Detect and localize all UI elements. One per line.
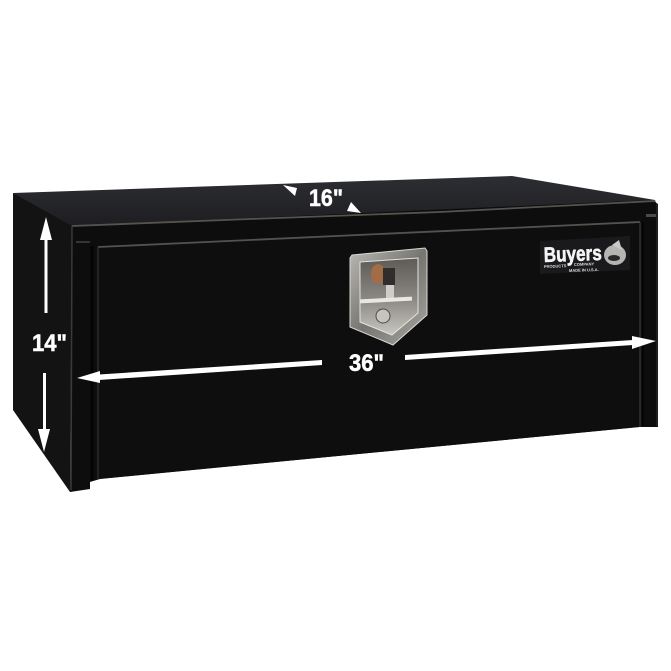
- Buyers logo badge: [540, 236, 630, 274]
- T-handle stem: [383, 268, 395, 300]
- dimension: width 16 inches: [283, 185, 361, 213]
- dimension: length 36 inches: 36": [349, 350, 384, 377]
- door panel: [98, 222, 640, 479]
- right door post: [643, 204, 657, 426]
- top surface of box: [13, 176, 657, 232]
- left side panel of box: [13, 193, 72, 492]
- T-handle bar: [360, 297, 412, 303]
- dimension: length 36 inches: [77, 336, 656, 383]
- left door post: [71, 226, 92, 490]
- latch bolt: [376, 309, 390, 323]
- front face of box: [70, 200, 658, 492]
- Buyers logo badge: Buyers: [543, 242, 602, 267]
- dimension: height 14 inches: [32, 217, 67, 452]
- latch recess: [360, 258, 418, 335]
- tool box: [13, 176, 658, 492]
- lid lip highlight: [72, 201, 655, 226]
- bulldog emblem: [604, 240, 626, 265]
- Buyers logo badge: MADE IN U.S.A.: [569, 267, 599, 273]
- dimension: width 16 inches: 16": [309, 185, 343, 212]
- latch plate: [350, 248, 427, 345]
- Buyers logo badge: PRODUCTS: [544, 263, 567, 269]
- orange reflection: [371, 264, 385, 284]
- latch: stainless T-handle: [350, 248, 427, 345]
- Buyers logo badge: COMPANY: [574, 261, 595, 267]
- dimension: height 14 inches: 14": [32, 330, 67, 357]
